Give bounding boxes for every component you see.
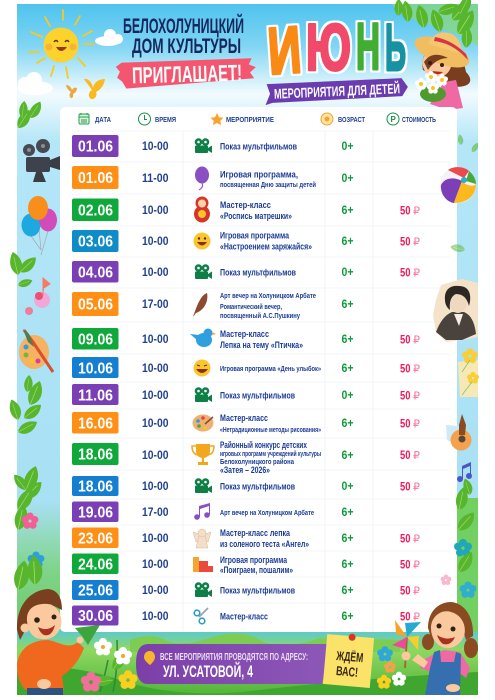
- row 23.06 angel workshop: Мастер-класс лепка: [220, 528, 291, 539]
- row 24.06 game programme: 50: [400, 558, 411, 572]
- row 09.06 bird workshop: 6+: [342, 332, 354, 346]
- row 09.06 bird workshop: [72, 328, 420, 351]
- row 03.06 mood programme: ₽: [413, 236, 420, 248]
- blue music note: [457, 462, 472, 482]
- row 04.06 cartoons: 10-00: [142, 267, 168, 279]
- sticky note: [323, 632, 374, 688]
- leaves top right: [391, 0, 481, 49]
- schedule table: [60, 107, 457, 632]
- icon: matryoshka: [194, 196, 210, 222]
- girl with bouquet: [411, 30, 473, 110]
- row 30.06 workshop: 30.06: [78, 608, 113, 625]
- row 24.06 game programme: «Поиграем, пошалим»: [220, 565, 293, 576]
- row 16.06 workshop: 50: [400, 416, 411, 430]
- row 01.06 cartoons: [72, 135, 354, 157]
- sun: [29, 10, 94, 78]
- row 09.06 bird workshop: ₽: [413, 334, 420, 346]
- row 04.06 cartoons: Показ мультфильмов: [220, 268, 296, 278]
- row 18.06 cartoons: 18.06: [78, 478, 113, 496]
- row 19.06 art evening: [72, 502, 354, 522]
- row 18.06 district contest: 18.06: [78, 446, 113, 464]
- row 18.06 district contest: ₽: [413, 449, 420, 462]
- row 09.06 bird workshop: Лепка на тему «Птичка»: [220, 340, 303, 351]
- icon: calendar: [79, 113, 89, 124]
- title: month: Ю: [306, 10, 351, 84]
- pink music note: [25, 278, 50, 315]
- row 02.06 matryoshka workshop: ₽: [413, 204, 420, 218]
- banner: invites: ПРИГЛАШАЕТ!: [132, 60, 242, 88]
- row 16.06 workshop: ₽: [413, 418, 420, 430]
- row 05.06 art evening: [72, 291, 354, 320]
- icon: palette: [192, 414, 214, 432]
- icon: quill: [193, 293, 207, 317]
- icon: scissors: [194, 608, 208, 624]
- row 16.06 workshop: 10-00: [142, 418, 168, 430]
- row 24.06 game programme: 10-00: [142, 559, 168, 571]
- row 09.06 bird workshop: 09.06: [78, 332, 113, 348]
- row 23.06 angel workshop: из соленого теста «Ангел»: [220, 539, 309, 550]
- row 10.06 smiles day: 6+: [342, 361, 354, 375]
- row 10.06 smiles day: ₽: [413, 362, 420, 376]
- row 18.06 district contest: Белохолуницкого района: [220, 457, 295, 466]
- row 30.06 workshop: 50: [400, 610, 411, 624]
- row 30.06 workshop: Мастер-класс: [220, 612, 268, 622]
- row 18.06 district contest: [72, 440, 420, 476]
- row 30.06 workshop: [72, 606, 420, 626]
- row 19.06 art evening: Арт вечер на Холуницком Арбате: [220, 508, 314, 517]
- icon: ruble coin: [387, 113, 399, 125]
- row 23.06 angel workshop: [72, 528, 420, 550]
- table header: ВОЗРАСТ: [338, 115, 365, 124]
- sticky note: ВАС!: [335, 663, 359, 680]
- row 24.06 game programme: 6+: [342, 557, 354, 571]
- row 18.06 cartoons: Показ мультфильмов: [220, 482, 295, 492]
- row 03.06 mood programme: Игровая программа: [220, 230, 290, 242]
- row 03.06 mood programme: 50: [400, 234, 411, 248]
- address pill: ВСЕ МЕРОПРИЯТИЯ ПРОВОДЯТСЯ ПО АДРЕСУ:: [160, 652, 308, 663]
- address pill: УЛ. УСАТОВОЙ, 4: [163, 662, 253, 681]
- row 18.06 cartoons: [72, 476, 420, 496]
- row 01.06 cartoons: Показ мультфильмов: [220, 142, 297, 152]
- row 01.06 cartoons: 01.06: [78, 138, 113, 156]
- row 04.06 cartoons: 50: [400, 266, 411, 280]
- row 24.06 game programme: ₽: [413, 558, 420, 572]
- row 03.06 mood programme: [72, 230, 420, 252]
- row 04.06 cartoons: 0+: [342, 265, 354, 279]
- row 03.06 mood programme: «Настроением заряжайся»: [220, 242, 312, 252]
- row 16.06 workshop: Мастер-класс: [220, 413, 268, 424]
- row 18.06 district contest: игровых программ учреждений культуры: [220, 449, 321, 458]
- heading: organiser: ДОМ КУЛЬТУРЫ: [132, 35, 241, 58]
- row 02.06 matryoshka workshop: «Роспись матрешки»: [220, 211, 292, 222]
- palette and brush: [19, 329, 53, 372]
- row 18.06 cartoons: 10-00: [142, 481, 168, 493]
- beach ball: [440, 167, 476, 203]
- row 01.06 cartoons: 10-00: [142, 141, 168, 153]
- icon: music notes: [194, 503, 210, 520]
- row 18.06 district contest: 50: [400, 448, 411, 462]
- row 16.06 workshop: 16.06: [78, 416, 113, 432]
- row 09.06 bird workshop: Мастер-класс: [220, 329, 269, 340]
- table header: [79, 113, 436, 125]
- row 01.06 game programme: 01.06: [78, 170, 113, 187]
- row 18.06 district contest: Районный конкурс детских: [220, 440, 307, 451]
- row 19.06 art evening: 17-00: [142, 507, 168, 519]
- ribbon: events for children: МЕРОПРИЯТИЯ ДЛЯ ДЕТЕЙ: [274, 79, 400, 102]
- row 23.06 angel workshop: ₽: [413, 532, 420, 546]
- row 24.06 game programme: [72, 554, 420, 576]
- butterflies: [66, 79, 105, 99]
- row 19.06 art evening: 19.06: [78, 504, 113, 522]
- row 30.06 workshop: 10-00: [142, 611, 168, 623]
- row 18.06 cartoons: 0+: [342, 479, 354, 493]
- title: month: Н: [356, 9, 380, 83]
- row 04.06 cartoons: ₽: [413, 266, 420, 280]
- row 18.06 district contest: 10-00: [142, 450, 168, 462]
- row 10.06 smiles day: 10-00: [142, 363, 168, 375]
- row 24.06 game programme: 24.06: [78, 556, 113, 574]
- Pushkin portrait: [433, 279, 478, 342]
- icon: star: [210, 113, 224, 125]
- row 11.06 cartoons: 0+: [342, 388, 354, 402]
- row 11.06 cartoons: Показ мультфильмов: [220, 390, 295, 402]
- icon: trophy: [192, 444, 214, 465]
- row 03.06 mood programme: 6+: [342, 234, 354, 248]
- row 05.06 art evening: посвященный А.С.Пушкину: [220, 311, 301, 320]
- row 10.06 smiles day: 10.06: [78, 360, 113, 378]
- row 05.06 art evening: 05.06: [78, 296, 113, 314]
- row 16.06 workshop: [72, 412, 420, 434]
- row 02.06 matryoshka workshop: 50: [400, 204, 411, 218]
- row 02.06 matryoshka workshop: [72, 196, 420, 222]
- row 16.06 workshop: 6+: [342, 416, 354, 430]
- row 01.06 cartoons: 0+: [342, 139, 354, 153]
- table header: ДАТА: [95, 115, 111, 124]
- ribbon: events for children: [265, 78, 408, 105]
- table header: СТОИМОСТЬ: [402, 115, 436, 124]
- row 04.06 cartoons: 04.06: [78, 264, 113, 282]
- yellow flowers: [458, 348, 479, 397]
- brush on palette: [446, 414, 472, 450]
- icon: age badge: [321, 113, 333, 125]
- icon: laughing face: [194, 360, 210, 376]
- icon: ruble coin: Р: [390, 115, 396, 124]
- row 30.06 workshop: ₽: [413, 610, 420, 624]
- icon: bird: [190, 328, 216, 347]
- heading: organiser: БЕЛОХОЛУНИЦКИЙ: [123, 14, 244, 38]
- text: Ь: [385, 10, 406, 84]
- film camera: [23, 139, 60, 182]
- row 02.06 matryoshka workshop: 02.06: [78, 202, 113, 220]
- row 09.06 bird workshop: 10-00: [142, 334, 168, 346]
- row 02.06 matryoshka workshop: Мастер-класс: [220, 200, 271, 211]
- row 10.06 smiles day: Игровая программа «День улыбок»: [220, 364, 321, 373]
- row 01.06 game programme: Игровая программа,: [220, 170, 298, 180]
- row 25.06 cartoons: Показ мультфильмов: [220, 586, 295, 596]
- row 05.06 art evening: 6+: [342, 297, 354, 311]
- row 18.06 district contest: 6+: [342, 448, 354, 462]
- row 16.06 workshop: «Нетрадиционные методы рисования»: [220, 425, 321, 434]
- side decoration: left: [7, 101, 60, 592]
- row 18.06 district contest: «Затея – 2026»: [220, 465, 270, 476]
- clouds: [17, 29, 123, 95]
- side decoration: right: [433, 134, 481, 632]
- row 02.06 matryoshka workshop: 10-00: [142, 205, 168, 217]
- girl with pinwheel: [392, 602, 478, 695]
- row 01.06 game programme: 11-00: [142, 173, 168, 185]
- row 11.06 cartoons: [72, 384, 420, 405]
- row 25.06 cartoons: 25.06: [78, 582, 113, 600]
- row 05.06 art evening: Романтический вечер,: [220, 302, 282, 311]
- row 11.06 cartoons: 10-00: [142, 390, 168, 402]
- icon: balloon: [195, 166, 209, 190]
- title: month: [265, 9, 406, 88]
- pinwheel: [392, 620, 421, 668]
- row 11.06 cartoons: 11.06: [78, 388, 113, 404]
- row 01.06 game programme: [72, 166, 354, 190]
- icon: puzzle: [193, 557, 213, 572]
- row 24.06 game programme: Игровая программа: [220, 555, 288, 566]
- heading: organiser: [123, 14, 244, 58]
- row 01.06 game programme: 0+: [342, 171, 354, 185]
- table header: МЕРОПРИЯТИЕ: [226, 115, 274, 124]
- row 03.06 mood programme: 10-00: [142, 236, 168, 248]
- title: month: И: [265, 12, 304, 88]
- row 30.06 workshop: 6+: [342, 609, 354, 623]
- row 04.06 cartoons: [72, 261, 420, 282]
- row 11.06 cartoons: 50: [400, 388, 411, 402]
- row 09.06 bird workshop: 50: [400, 332, 411, 346]
- row 23.06 angel workshop: 10-00: [142, 533, 168, 545]
- row 23.06 angel workshop: 23.06: [78, 530, 113, 548]
- icon: smile: [194, 232, 210, 250]
- icon: clock: [138, 113, 150, 125]
- icon: location pin: [144, 651, 155, 665]
- row 05.06 art evening: Арт вечер на Холуницком Арбате: [220, 291, 316, 300]
- balloons: [22, 196, 57, 255]
- row 25.06 cartoons: [72, 580, 420, 600]
- row 03.06 mood programme: 03.06: [78, 234, 113, 250]
- footer meadow: [17, 630, 478, 695]
- row 10.06 smiles day: [72, 357, 420, 378]
- row 10.06 smiles day: 50: [400, 362, 411, 376]
- row 19.06 art evening: 6+: [342, 505, 354, 519]
- table header: ВРЕМЯ: [155, 115, 176, 124]
- row 23.06 angel workshop: 50: [400, 532, 411, 546]
- row 25.06 cartoons: 50: [400, 584, 411, 598]
- address pill: [136, 644, 330, 684]
- sticky note: ЖДЁМ: [335, 648, 364, 665]
- row 23.06 angel workshop: 6+: [342, 531, 354, 545]
- row 25.06 cartoons: 10-00: [142, 585, 168, 597]
- row 25.06 cartoons: 6+: [342, 583, 354, 597]
- row 02.06 matryoshka workshop: 6+: [342, 203, 354, 217]
- meadow flowers: [81, 638, 406, 692]
- row 18.06 cartoons: ₽: [413, 480, 420, 494]
- row 11.06 cartoons: ₽: [413, 390, 420, 402]
- row 01.06 game programme: посвященная Дню защиты детей: [220, 180, 316, 189]
- icon: angel: [193, 529, 211, 548]
- banner: invites: [116, 58, 256, 89]
- row 25.06 cartoons: ₽: [413, 584, 420, 598]
- row 05.06 art evening: 17-00: [142, 299, 168, 311]
- row 18.06 cartoons: 50: [400, 480, 411, 494]
- boy with paper plane: [17, 589, 100, 695]
